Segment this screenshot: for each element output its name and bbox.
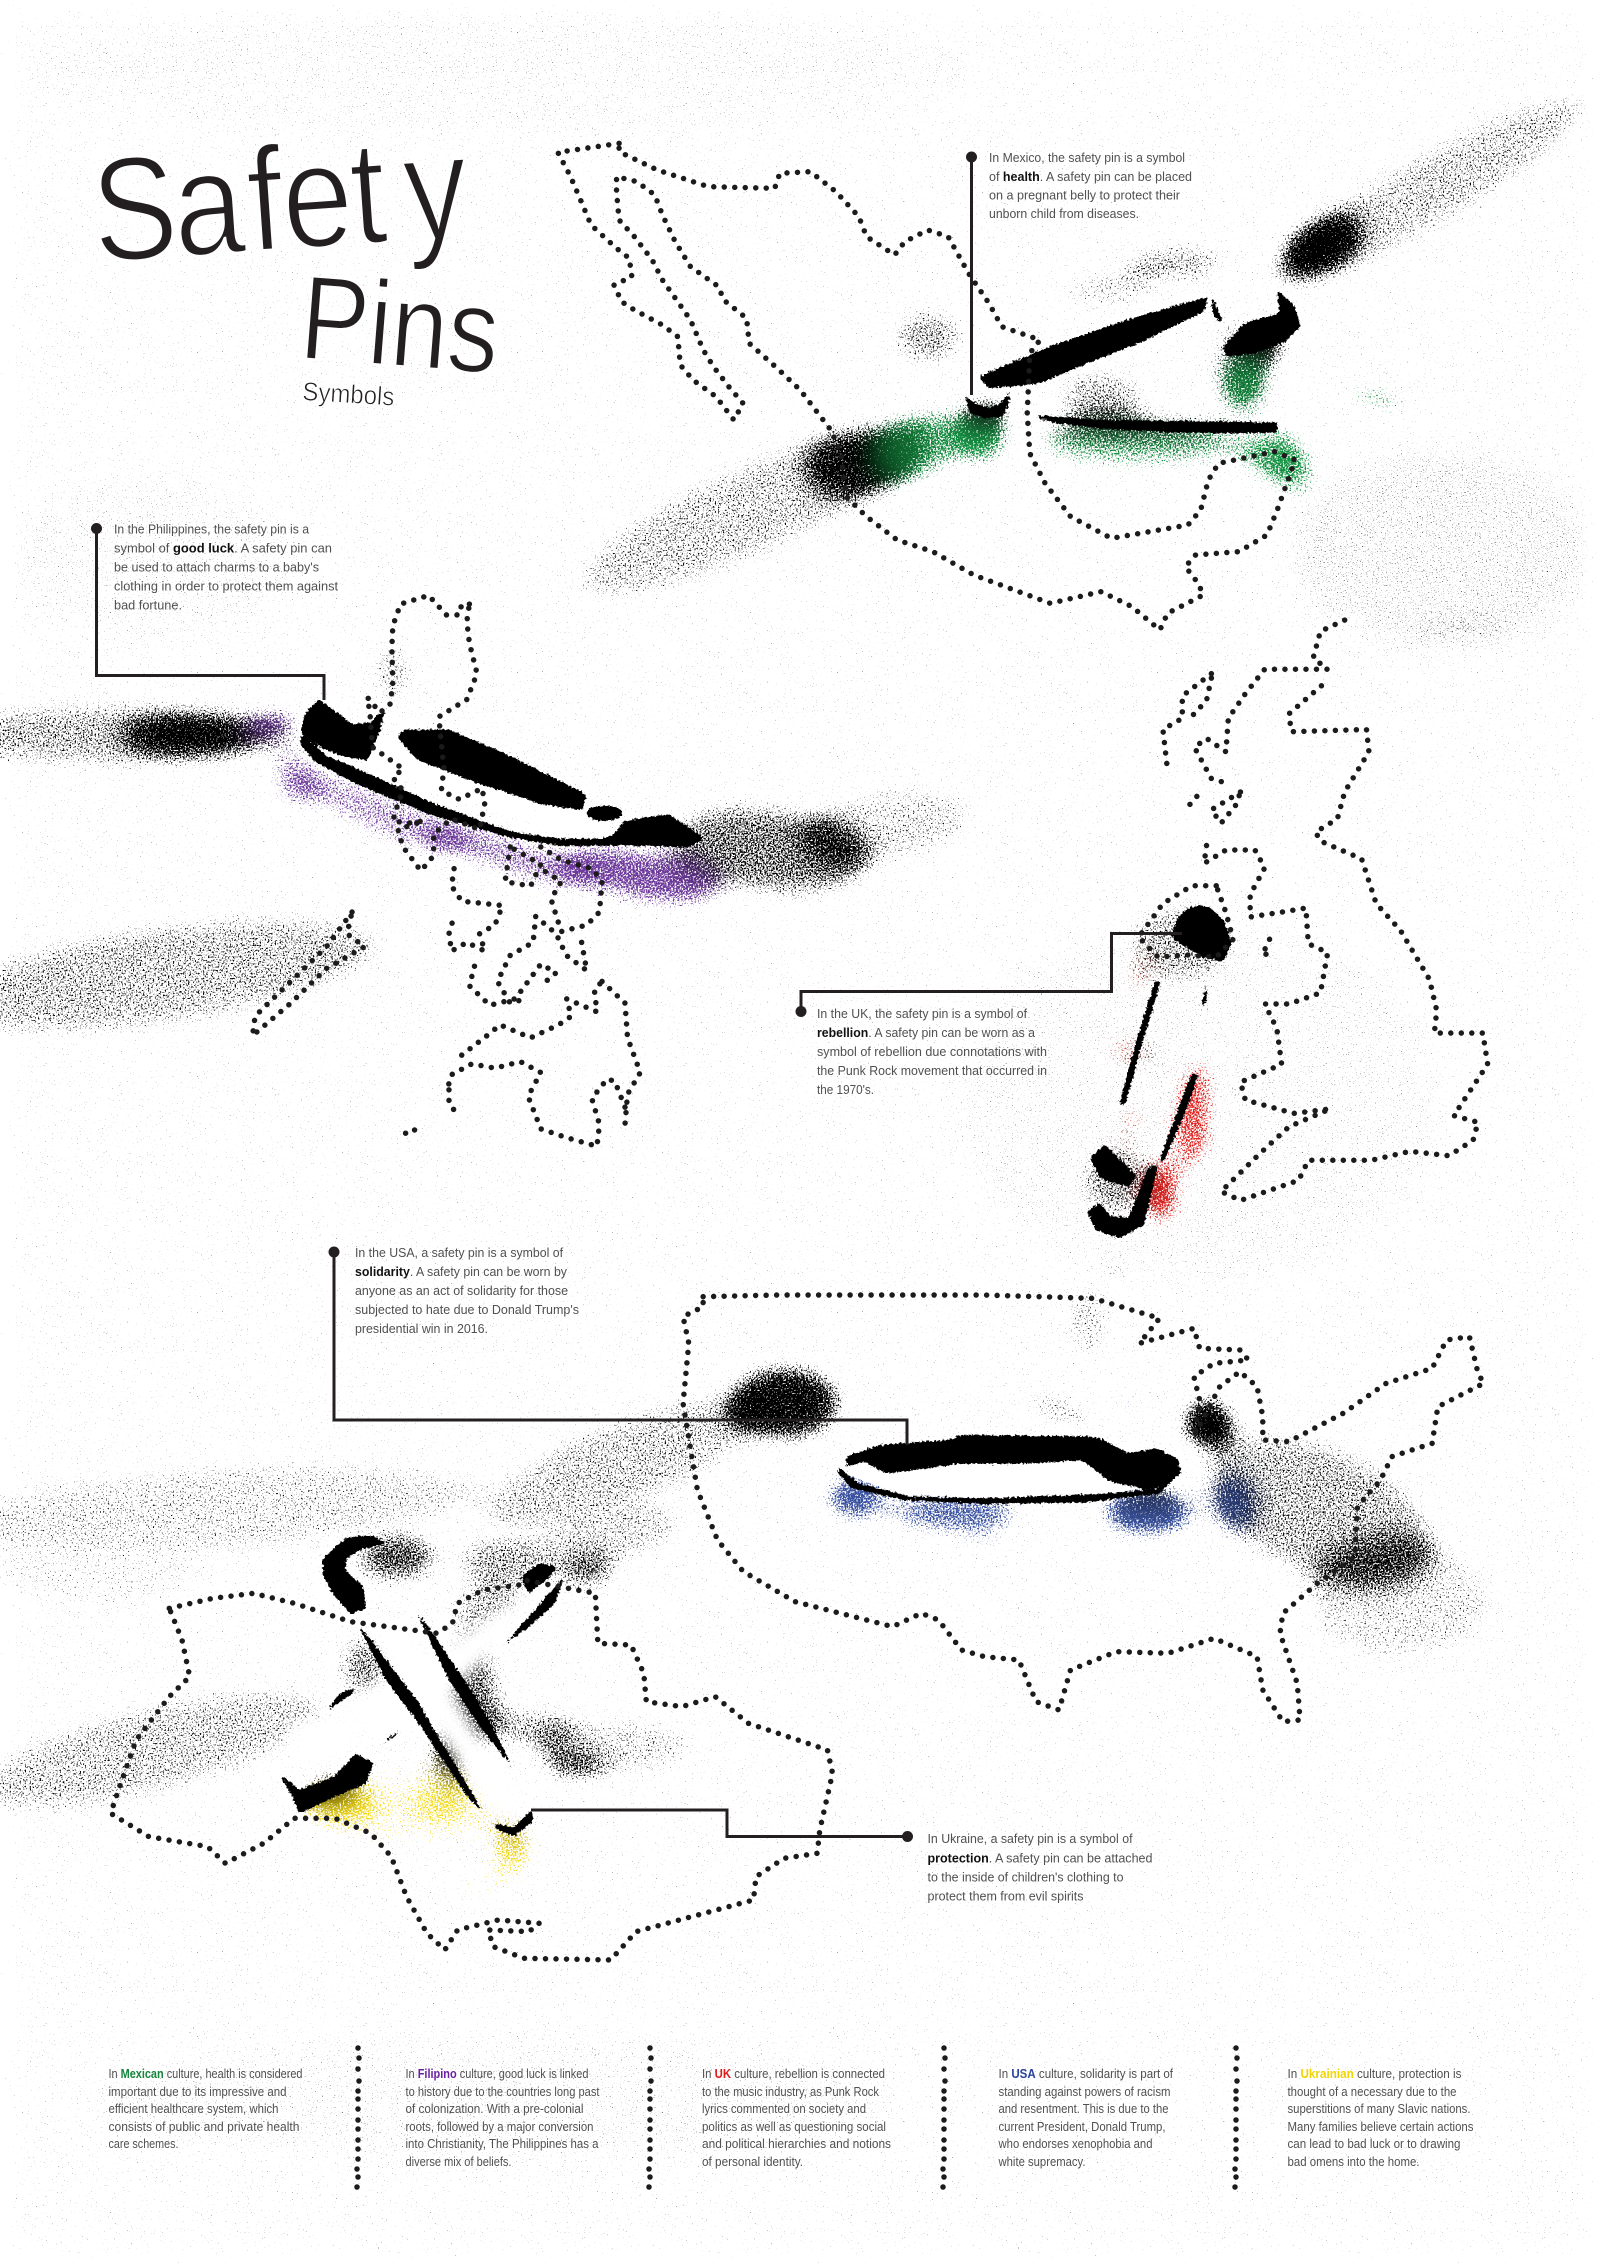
callout: USA: anyone as an act of solidarity for those: [355, 1283, 568, 1298]
callout: Philippines: In the Philippines, the safety pin is a: [114, 522, 310, 536]
leader line: Ukraine: [531, 1810, 913, 1842]
callout: USA: In the USA, a safety pin is a symbol of: [355, 1245, 563, 1260]
safety pin: Philippines: [301, 700, 704, 847]
callout: USA: solidarity. A safety pin can be worn by: [355, 1264, 567, 1279]
callout: UK: In the UK, the safety pin is a symbol of: [817, 1006, 1027, 1021]
footer: Mexican culture text: efficient healthcare system, which: [108, 2101, 278, 2116]
callout: Ukraine: protect them from evil spirits: [928, 1888, 1084, 1904]
callout: Philippines: symbol of good luck. A safety pin can: [114, 540, 332, 556]
footer: Ukrainian culture text: In Ukrainian culture, protection is: [1288, 2066, 1462, 2081]
divider 3: [943, 2048, 945, 2187]
callout: UK: rebellion. A safety pin can be worn as a: [817, 1025, 1036, 1040]
callout: Mexico: [989, 150, 1192, 221]
callout: USA: presidential win in 2016.: [355, 1321, 488, 1336]
grain and red spread: UK: [1076, 600, 1536, 1296]
panel: UK: [796, 600, 1536, 1296]
footer: Filipino culture text: into Christianity, The Philippines has a: [406, 2136, 599, 2151]
footer: USA culture text: [998, 2066, 1173, 2169]
safety pin: Mexico: [966, 290, 1300, 433]
footer: UK culture text: and political hierarchies and notions: [702, 2136, 891, 2151]
grain and green spread: Mexico: [551, 59, 1600, 637]
title word: Safety: Safety: [86, 103, 473, 294]
callout: UK: the 1970's.: [817, 1082, 874, 1097]
callout: UK: [817, 1006, 1047, 1097]
footer: Ukrainian culture text: can lead to bad luck or to drawing: [1288, 2136, 1460, 2151]
title: [86, 103, 504, 412]
grain and yellow spread: Ukraine: [0, 1483, 702, 1910]
callout: Philippines: clothing in order to protect them against: [114, 578, 338, 594]
callout: Ukraine: [928, 1831, 1152, 1904]
subtitle: Symbols: [302, 376, 395, 412]
map outline: USA: [683, 1295, 1484, 1722]
footer: USA culture text: current President, Donald Trump,: [998, 2119, 1166, 2134]
footer: UK culture text: [702, 2066, 891, 2169]
safety pin: UK: [1088, 906, 1231, 1238]
footer: Filipino culture text: to history due to the countries long past: [406, 2084, 600, 2099]
footer: Mexican culture text: consists of public and private health: [108, 2119, 300, 2134]
footer: USA culture text: who endorses xenophobia and: [998, 2136, 1152, 2151]
footer: Ukrainian culture text: thought of a necessary due to the: [1288, 2084, 1456, 2099]
callout: Mexico: In Mexico, the safety pin is a symbol: [989, 150, 1185, 165]
callout: Philippines: be used to attach charms to a baby's: [114, 560, 319, 574]
map outline: Mexico: [558, 143, 1295, 630]
divider 1: [357, 2048, 359, 2187]
callout: Ukraine: In Ukraine, a safety pin is a symbol of: [928, 1831, 1133, 1846]
footer: USA culture text: white supremacy.: [998, 2154, 1086, 2169]
leader line: Philippines: [91, 523, 324, 700]
callout: USA: subjected to hate due to Donald Trump's: [355, 1302, 579, 1317]
leader line: UK: [796, 934, 1182, 1017]
footer: Mexican culture text: In Mexican culture, health is considered: [108, 2066, 302, 2081]
footer: UK culture text: to the music industry, as Punk Rock: [702, 2084, 879, 2099]
footer: Filipino culture text: In Filipino culture, good luck is linked: [406, 2066, 588, 2081]
footer: USA culture text: In USA culture, solidarity is part of: [998, 2066, 1173, 2081]
map outline: Philippines: [253, 595, 640, 1146]
callout: Mexico: unborn child from diseases.: [989, 206, 1139, 221]
footer: UK culture text: In UK culture, rebellion is connected: [702, 2066, 885, 2081]
footer: USA culture text: standing against powers of racism: [998, 2084, 1170, 2099]
divider 4: [1235, 2048, 1237, 2187]
footer: UK culture text: politics as well as questioning social: [702, 2119, 886, 2134]
footer: Ukrainian culture text: [1288, 2066, 1474, 2169]
callout: Ukraine: protection. A safety pin can be attached: [928, 1850, 1152, 1866]
footer: Ukrainian culture text: Many families believe certain actions: [1288, 2119, 1474, 2134]
footer: UK culture text: lyrics commented on society and: [702, 2101, 866, 2116]
divider 2: [649, 2048, 651, 2187]
footer: Filipino culture text: of colonization. With a pre-colonial: [406, 2101, 584, 2116]
footer: UK culture text: of personal identity.: [702, 2154, 803, 2169]
callout: Philippines: bad fortune.: [114, 598, 182, 612]
footer: Mexican culture text: important due to its impressive and: [108, 2084, 286, 2099]
footer: Ukrainian culture text: superstitions of many Slavic nations.: [1288, 2101, 1470, 2116]
panel: USA: [0, 1245, 1500, 1722]
title word: Pins: Pins: [296, 250, 504, 399]
callout: Philippines: [114, 522, 338, 612]
leader line: USA: [328, 1246, 907, 1445]
footer: Mexican culture text: care schemes.: [108, 2136, 178, 2151]
leader line: Mexico: [966, 152, 977, 395]
footer: Ukrainian culture text: bad omens into the home.: [1288, 2154, 1420, 2169]
map outline: UK: [1139, 620, 1488, 1200]
safety pins: Ukraine: [279, 1535, 565, 1836]
grain and blue spread: USA: [0, 1278, 1500, 1665]
callout: Ukraine: to the inside of children's clothing to: [928, 1870, 1124, 1884]
white clearing: Ukraine crossed pin bodies: [289, 1587, 554, 1820]
footer: Filipino culture text: diverse mix of beliefs.: [406, 2154, 512, 2169]
callout: USA: [355, 1245, 579, 1336]
safety pin: USA: [838, 1435, 1182, 1504]
footer: Filipino culture text: [406, 2066, 600, 2169]
white clearing: Philippines pin body: [367, 726, 612, 834]
panel: Ukraine: [0, 1483, 1152, 1960]
callout: UK: symbol of rebellion due connotations with: [817, 1044, 1047, 1059]
footer: USA culture text: and resentment. This is due to the: [998, 2101, 1168, 2116]
grain and purple spread: Philippines: [0, 635, 985, 1062]
map outline: Ukraine: [111, 1580, 833, 1960]
callout: Mexico: on a pregnant belly to protect their: [989, 188, 1181, 202]
panel: Mexico: [551, 59, 1600, 637]
footer: Mexican culture text: [108, 2066, 302, 2151]
callout: Mexico: of health. A safety pin can be placed: [989, 169, 1192, 184]
panel: Philippines: [0, 522, 985, 1146]
callout: UK: the Punk Rock movement that occurred in: [817, 1063, 1047, 1078]
footer: Filipino culture text: roots, followed by a major conversion: [406, 2119, 594, 2134]
white clearing: USA pin body: [838, 1444, 1180, 1499]
